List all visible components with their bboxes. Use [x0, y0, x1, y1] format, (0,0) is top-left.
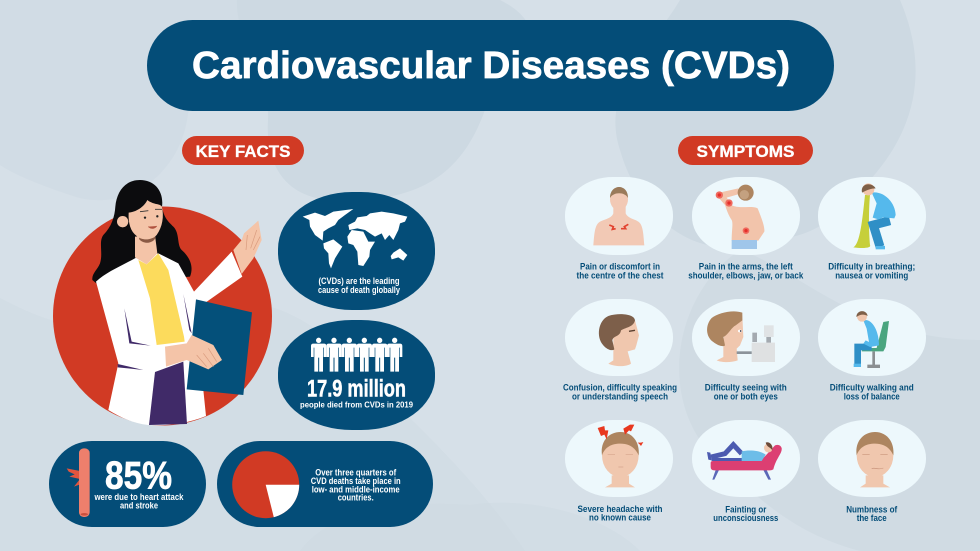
panel: three quarters: Over three quarters of [315, 468, 397, 478]
icon: world map [303, 209, 407, 268]
symptom: arm and back pain: Pain in the arms, the left [699, 260, 793, 271]
panel: three quarters: countries. [338, 493, 374, 503]
symptom: chest pain: Pain or discomfort in [580, 260, 660, 271]
panel: 85%: were due to heart attack [94, 492, 184, 502]
heading: symptoms [678, 136, 813, 165]
illustration: doctor in red circle [53, 180, 272, 426]
symptom: vision problems [692, 299, 800, 401]
symptom: severe headache: no known cause [589, 512, 651, 523]
heading: key facts [182, 136, 304, 165]
panel: three quarters [217, 441, 433, 527]
symptom: facial numbness: Numbness of [846, 504, 898, 514]
panel: 17.9 million: 17.9 million [307, 376, 406, 402]
symptom: arm and back pain [688, 177, 804, 281]
symptom: breathing and nausea: Difficulty in breathing; [828, 260, 915, 271]
symptom: walking and balance [818, 299, 926, 401]
heading: key facts: KEY FACTS [196, 142, 290, 161]
panel: leading cause of death [278, 192, 435, 310]
symptom: fainting: unconsciousness [713, 512, 778, 523]
symptom: facial numbness: the face [857, 512, 887, 523]
symptom: severe headache: Severe headache with [578, 503, 663, 514]
symptom: vision problems: Difficulty seeing with [705, 382, 787, 393]
symptom: chest pain: the centre of the chest [576, 270, 664, 281]
panel: 85%: 85% [105, 454, 172, 498]
symptom: confusion [563, 299, 677, 401]
symptom: fainting: Fainting or [725, 504, 767, 514]
symptom: chest pain [565, 177, 673, 281]
panel: leading cause of death: cause of death globally [318, 285, 400, 295]
panel: 85%: and stroke [120, 501, 158, 511]
symptom: fainting [692, 420, 800, 523]
panel: 85% [49, 441, 206, 527]
symptom: confusion: or understanding speech [572, 390, 668, 401]
symptom: walking and balance: loss of balance [844, 390, 900, 401]
heading: symptoms: SYMPTOMS [696, 142, 794, 161]
symptom: vision problems: one or both eyes [714, 390, 778, 401]
symptom: breathing and nausea [818, 177, 926, 281]
panel: 17.9 million: people died from CVDs in 2019 [300, 400, 413, 410]
symptom: arm and back pain: shoulder, elbows, jaw, or back [688, 270, 804, 281]
symptom: walking and balance: Difficulty walking and [830, 382, 914, 393]
symptom: confusion: Confusion, difficulty speaking [563, 382, 677, 393]
icon: artery [67, 448, 90, 517]
panel: 17.9 million [278, 320, 435, 430]
symptom: breathing and nausea: nausea or vomiting [835, 270, 908, 281]
icon: six people [311, 338, 402, 372]
symptom: facial numbness [818, 420, 926, 523]
title: Cardiovascular Diseases (CVDs) [192, 45, 790, 87]
symptom: severe headache [565, 420, 673, 523]
panel: three quarters: low- and middle-income [312, 484, 400, 494]
panel: three quarters: CVD deaths take place in [311, 476, 401, 486]
panel: leading cause of death: (CVDs) are the leading [318, 276, 400, 286]
pie chart [232, 451, 299, 518]
title [147, 20, 834, 111]
